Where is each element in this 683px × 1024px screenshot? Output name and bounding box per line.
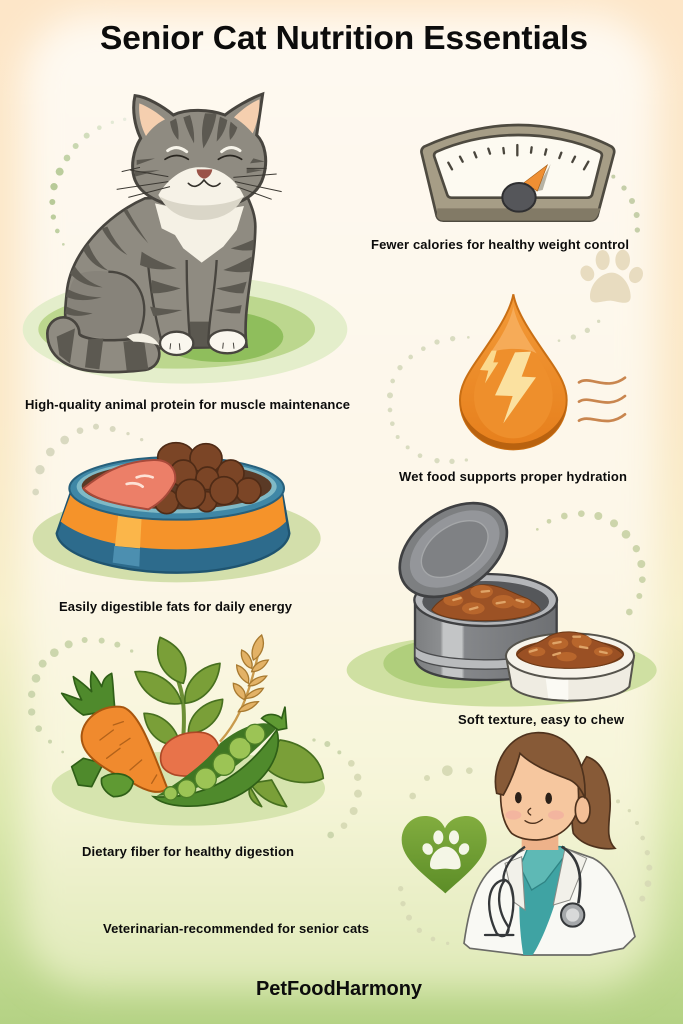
icon: veterinarian with stethoscope [341,733,652,955]
icon: orange water drop with lightning [387,294,625,464]
caption: soft texture: Soft texture, easy to chew [458,712,625,727]
icon: paw print watermark [578,250,646,303]
caption: protein: High-quality animal protein for muscle maintenance [25,397,350,412]
icon: food bowl with meat and kibble [32,424,321,582]
caption: fiber: Dietary fiber for healthy digestion [82,844,294,859]
icon: vegetables, peas and grain [28,635,341,838]
decorative dots: gauge [611,175,640,233]
icon: cat on green mat [23,94,347,384]
caption: fats: Easily digestible fats for daily energy [59,599,293,614]
icon: weight scale gauge [421,125,614,221]
icon: green heart with paw [402,816,487,893]
caption: calories: Fewer calories for healthy weight control [371,237,629,252]
icon: opened can and dish of soft food [347,484,657,707]
caption: hydration: Wet food supports proper hydration [399,469,627,484]
caption: veterinarian: Veterinarian-recommended for senior cats [103,921,369,936]
tail [57,328,159,371]
title: Senior Cat Nutrition Essentials [100,20,588,57]
brand name: PetFoodHarmony [256,978,423,1000]
